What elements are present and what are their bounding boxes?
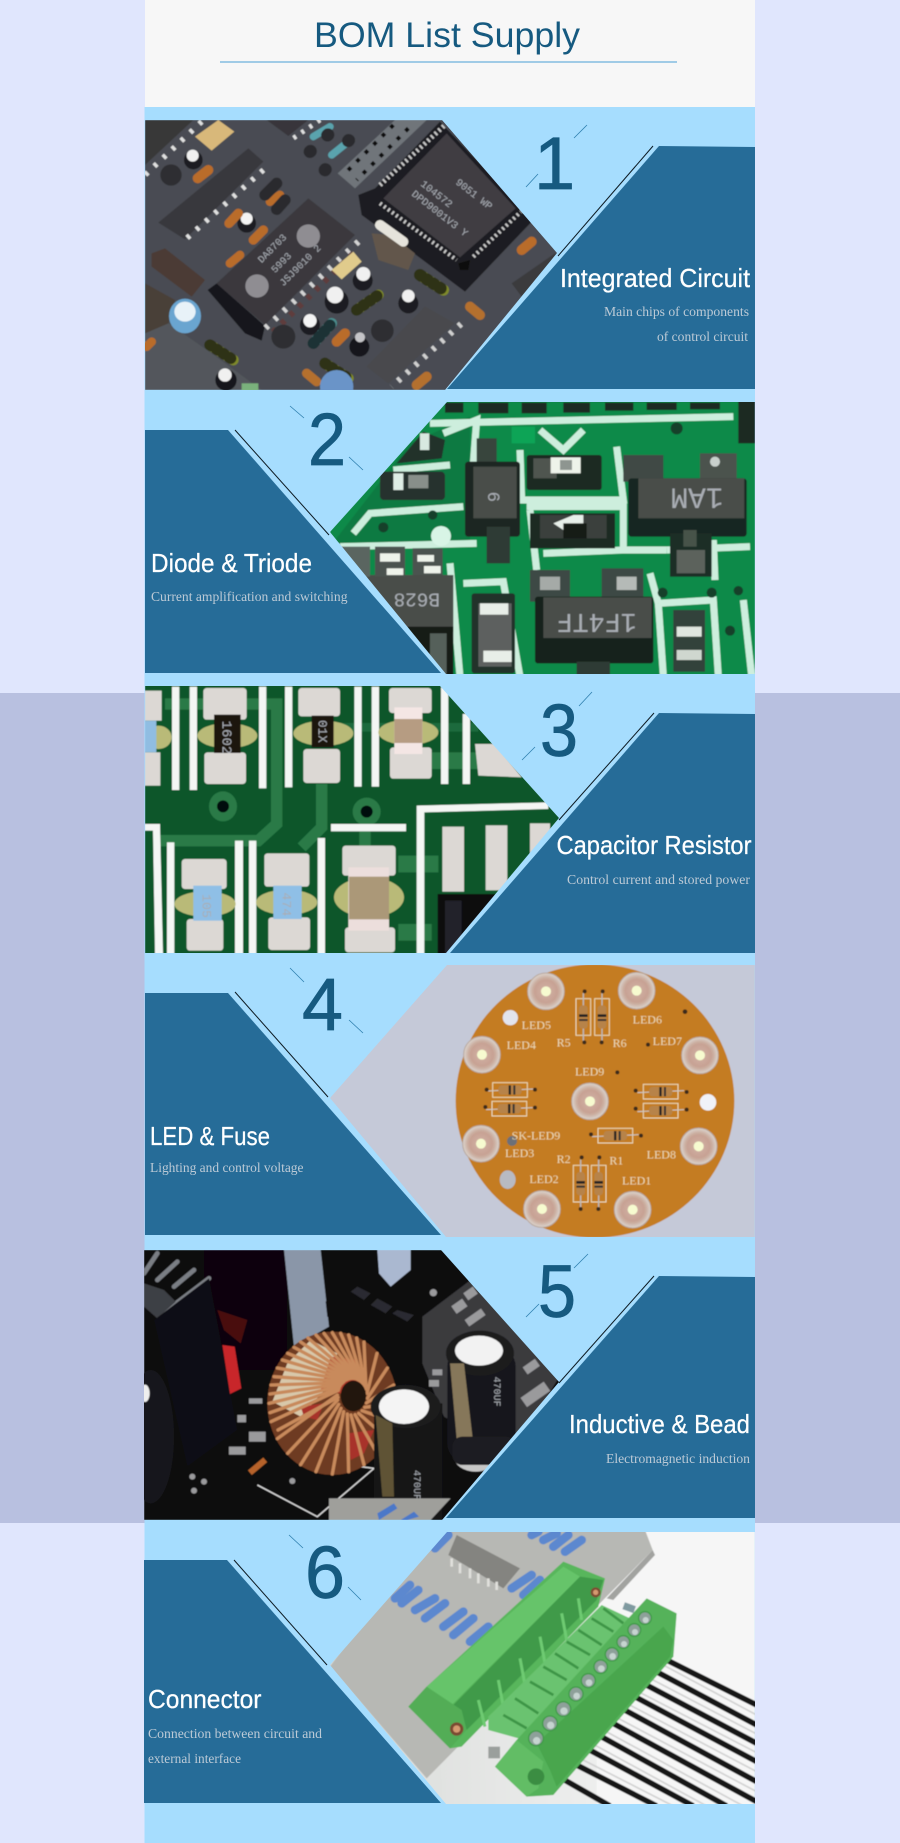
toroid inductor [267, 1332, 397, 1475]
photo: circuit board with chips [145, 120, 565, 403]
number 2: 2 [308, 398, 346, 481]
accent line [558, 146, 653, 256]
heading: connector: Connector [148, 1684, 262, 1714]
heading: diode and triode: Diode & Triode [151, 548, 312, 578]
accent line [559, 713, 654, 820]
photo: smd resistors and capacitors: 474 [277, 892, 292, 916]
photo: round orange led board: LED2 [529, 1172, 559, 1186]
blue text panel [144, 1560, 441, 1803]
plug connector [495, 1598, 677, 1797]
photo: round orange led board: LED3 [505, 1146, 534, 1160]
description: Control current and stored power [567, 873, 750, 888]
photo: smd resistors and capacitors: 01X [314, 720, 329, 743]
number 1 [526, 122, 587, 205]
photo: round orange led board: LED9 [575, 1065, 604, 1079]
photo: copper toroid inductor and capacitors [127, 1250, 564, 1520]
description [604, 305, 749, 345]
photo: smd resistors and capacitors [145, 684, 565, 954]
heading: capacitor resistor: Capacitor Resistor [556, 830, 752, 860]
photo: green terminal block connectors [330, 1530, 757, 1806]
description: Main chips of components [604, 305, 749, 320]
number 2 [290, 398, 363, 481]
number 5 [526, 1250, 588, 1333]
photo: round orange led board: LED4 [507, 1038, 536, 1052]
number 6 [289, 1531, 361, 1614]
panel: connector [144, 1530, 757, 1806]
number 3 [522, 689, 592, 772]
panel: diode and triode [145, 398, 755, 677]
blue text panel [446, 1276, 755, 1518]
photo: smd resistors and capacitors: 105 [197, 894, 212, 918]
photo: green pcb with smd parts: B628 [394, 587, 440, 609]
photo: copper toroid inductor and capacitors: 470UF [411, 1470, 422, 1500]
photo: round orange led board: LED7 [653, 1034, 682, 1048]
header connector [408, 1562, 605, 1748]
accent line [235, 992, 328, 1097]
photo: round orange led board: R6 [613, 1036, 627, 1050]
black cables [562, 1658, 757, 1806]
accent line [559, 1276, 654, 1383]
description: external interface [148, 1752, 241, 1767]
panel: capacitor and resistor [145, 684, 755, 954]
photo: round orange led board: LED6 [633, 1013, 662, 1027]
number 4 [290, 963, 363, 1046]
number 5: 5 [538, 1250, 576, 1333]
photo: circuit board with chips: JSJ9010 2 [278, 243, 324, 289]
photo: round orange led board: SK-LED9 [512, 1129, 560, 1143]
description: Current amplification and switching [151, 590, 348, 605]
photo: round orange led board: R5 [557, 1035, 571, 1049]
photo: green pcb with smd parts: 1F4TF [557, 605, 637, 635]
description: Lighting and control voltage [150, 1161, 304, 1176]
ic and resistors [395, 1532, 582, 1642]
accent line [235, 430, 329, 535]
number 3: 3 [540, 689, 578, 772]
photo: round orange led board: LED1 [622, 1174, 651, 1188]
blue text panel [450, 713, 755, 953]
accent line [234, 1560, 327, 1665]
photo: copper toroid inductor and capacitors: 470UF [491, 1377, 502, 1407]
title: BOM List Supply [314, 16, 581, 55]
photo: circuit board with chips: DA8703 [256, 232, 289, 265]
description: Electromagnetic induction [606, 1452, 750, 1467]
heading: inductive and bead: Inductive & Bead [569, 1409, 750, 1439]
photo: round orange led board [330, 963, 755, 1239]
heading: led and fuse: LED & Fuse [150, 1121, 270, 1151]
photo: green pcb with smd parts [330, 400, 755, 677]
photo: round orange led board: R1 [609, 1154, 623, 1168]
photo: round orange led board: R2 [557, 1152, 571, 1166]
panel: integrated circuit [145, 120, 755, 403]
blue text panel [145, 430, 441, 673]
photo: green pcb with smd parts: 6 [482, 492, 501, 502]
blue text panel [145, 993, 441, 1235]
description: Connection between circuit and [148, 1727, 322, 1742]
description: of control circuit [657, 330, 748, 345]
number 4: 4 [302, 963, 343, 1046]
number 1: 1 [534, 122, 575, 205]
photo: circuit board with chips: 104572 [418, 179, 454, 211]
number 6: 6 [305, 1531, 345, 1614]
blue text panel [447, 146, 755, 389]
photo: green pcb with smd parts: 1AM [671, 479, 723, 512]
panel: led and fuse [145, 963, 755, 1239]
description [148, 1727, 322, 1767]
photo: circuit board with chips: 5993 [269, 251, 294, 275]
photo: circuit board with chips: 9051 WP [453, 177, 494, 213]
photo: smd resistors and capacitors: 1602 [217, 721, 233, 754]
panel: inductive and bead [127, 1250, 755, 1520]
photo: round orange led board: LED8 [647, 1148, 676, 1162]
heading: integrated circuit: Integrated Circuit [560, 263, 751, 293]
photo: circuit board with chips: DPD9001V3 Y [409, 189, 470, 241]
photo: round orange led board: LED5 [522, 1018, 551, 1032]
